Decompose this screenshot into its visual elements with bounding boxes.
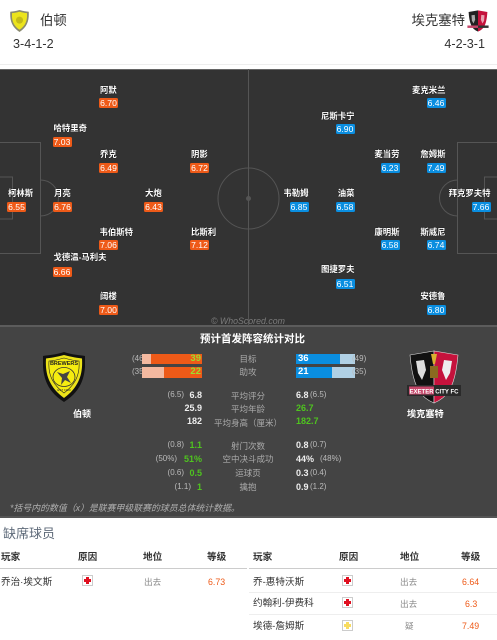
table: home missing players: 地位: [143, 552, 162, 563]
previous season assists: (35): [132, 367, 146, 376]
player: 康明斯: 康明斯: [374, 227, 400, 237]
player: 韦勒姆: 韦勒姆: [283, 188, 308, 198]
row: 约翰利-伊费科: 约翰利-伊费科: [253, 598, 314, 609]
home assists bar: [132, 366, 202, 378]
row: 埃德-詹姆斯: 7.49: [462, 621, 479, 631]
pitch markings: [0, 69, 497, 325]
home stat values: 0.5: [189, 468, 202, 478]
player: 比斯利: 7.12: [191, 240, 208, 250]
home stat values: 6.8: [189, 390, 202, 400]
away stat values: 0.9: [296, 482, 309, 492]
icon: Burton crest small: [10, 10, 29, 32]
player: 麦当劳: 6.23: [382, 163, 398, 173]
stat labels: 擒抱: [239, 482, 256, 492]
player: 拜克罗夫特: [448, 188, 491, 212]
previous season goals: (46): [132, 354, 146, 363]
previous season goals: (49): [352, 354, 366, 363]
away stat values: 0.8: [296, 440, 309, 450]
player: 月亮: 6.76: [54, 202, 71, 212]
panel: predicted lineup stats comparison: [0, 327, 497, 518]
home stat values: (1.1): [175, 482, 191, 491]
table: home missing players: [0, 551, 247, 588]
icon: Exeter crest: [407, 350, 461, 404]
player: 詹姆斯: 詹姆斯: [420, 149, 446, 159]
row: 约翰利-伊费科: 出去: [400, 599, 417, 609]
player: 阴影: 阴影: [191, 149, 208, 159]
player: 安德鲁: 6.80: [428, 305, 444, 315]
home assists value: 22: [190, 366, 201, 377]
stat labels: 目标: [239, 354, 256, 364]
away assists bar: [296, 366, 366, 378]
player: 安德鲁: [420, 291, 446, 315]
player: 阔楼: [99, 291, 118, 315]
stat labels: [214, 354, 282, 492]
home formation: 3-4-1-2: [13, 37, 54, 51]
icon: Burton crest: BREWERS: [50, 361, 78, 367]
table: home missing players: 原因: [78, 552, 97, 563]
player: 戈德温-马利夫: 6.66: [54, 267, 70, 277]
player: 阿默: [99, 85, 118, 108]
home stat values: 1.1: [189, 440, 202, 450]
stat labels: 平均身高（厘米）: [214, 418, 282, 428]
watermark: © WhoScored.com: [211, 316, 285, 326]
table: away missing players: 玩家: [253, 552, 272, 563]
player: 阴影: 6.72: [191, 163, 208, 173]
home goals value: 39: [190, 353, 201, 364]
home stat values: (0.8): [168, 440, 184, 449]
panel: pitch: [0, 69, 497, 327]
stats title: 预计首发阵容统计对比: [200, 333, 305, 345]
icon: injury cross: [342, 597, 353, 608]
player: 比斯利: 比斯利: [191, 227, 216, 237]
player: 月亮: [53, 188, 72, 212]
home stat values: (6.5): [168, 390, 184, 399]
player: 韦勒姆: [283, 188, 309, 212]
row: 乔治·埃文斯: [1, 575, 225, 588]
row: 埃德-詹姆斯: 疑: [405, 621, 414, 631]
away goals value: 36: [298, 353, 309, 364]
away stat values: (6.5): [310, 390, 326, 399]
player: 乔克: [99, 149, 118, 173]
player: 乔克: 6.49: [100, 163, 117, 173]
stat labels: 射门次数: [231, 441, 265, 451]
player: 比斯利: [190, 227, 216, 250]
player: 麦克米兰: 麦克米兰: [412, 85, 446, 95]
away stat values: (48%): [320, 454, 341, 463]
player: 安德鲁: 安德鲁: [420, 291, 446, 301]
player: 拜克罗夫特: 7.66: [473, 202, 489, 212]
away stat values: (1.2): [310, 482, 326, 491]
row: 约翰利-伊费科: [249, 597, 497, 611]
player: 柯林斯: [7, 188, 33, 212]
player: 詹姆斯: 7.49: [428, 163, 444, 173]
away stat values: 182.7: [296, 416, 319, 426]
player: 图捷罗夫: 图捷罗夫: [321, 264, 354, 274]
player: 麦当劳: 麦当劳: [374, 149, 400, 159]
player: 斯威尼: 斯威尼: [420, 227, 446, 237]
home team name: 伯顿: [40, 13, 67, 28]
player: 詹姆斯: [420, 149, 446, 173]
player: 乔克: 乔克: [100, 149, 117, 159]
home stat values: (50%): [156, 454, 177, 463]
player: 尼斯卡宁: 6.90: [337, 124, 353, 134]
home goals bar: [132, 353, 202, 364]
player: 哈特里奇: 哈特里奇: [54, 123, 87, 133]
away stat values: (0.4): [310, 468, 326, 477]
row: 乔-惠特沃斯: 6.64: [462, 577, 479, 587]
stat labels: 助攻: [239, 367, 256, 377]
home stat values: [156, 390, 202, 492]
player: 尼斯卡宁: 尼斯卡宁: [321, 111, 354, 121]
away goals bar: [296, 353, 366, 364]
player: 韦伯斯特: [99, 227, 133, 250]
home stat values: 51%: [184, 454, 202, 464]
header: match teams and formations: [0, 0, 497, 65]
player: 阔楼: 7.00: [100, 305, 117, 315]
stat labels: 平均评分: [231, 391, 265, 401]
player: 大炮: 大炮: [145, 188, 162, 198]
home stat values: 182: [187, 416, 202, 426]
stat labels: 运球页: [235, 468, 261, 478]
player: 韦伯斯特: 韦伯斯特: [100, 227, 133, 237]
player: 韦伯斯特: 7.06: [100, 240, 117, 250]
icon: injury cross: [82, 575, 93, 586]
table: home missing players: 玩家: [1, 552, 20, 563]
table: away missing players: 等级: [461, 552, 480, 563]
home players: [7, 85, 216, 315]
away crest label: 埃克塞特: [407, 409, 444, 419]
player: 月亮: 月亮: [54, 188, 71, 198]
away stat values: 44%: [296, 454, 314, 464]
row: 乔-惠特沃斯: 出去: [400, 577, 417, 587]
player: 哈特里奇: [53, 123, 87, 147]
player: 哈特里奇: 7.03: [54, 137, 70, 147]
player: 大炮: [144, 188, 163, 212]
away players: [283, 85, 491, 315]
icon: Burton crest: [43, 352, 85, 402]
player: 阿默: 6.70: [100, 98, 117, 108]
player: 柯林斯: 柯林斯: [8, 188, 33, 198]
player: 大炮: 6.43: [145, 202, 162, 212]
player: 阴影: [190, 149, 209, 173]
player: 麦克米兰: [412, 85, 446, 108]
player: 斯威尼: 6.74: [428, 240, 444, 250]
away stat values: 0.3: [296, 468, 309, 478]
table: away missing players: 原因: [339, 552, 358, 563]
away formation: 4-2-3-1: [444, 37, 485, 51]
away stat values: (0.7): [310, 440, 326, 449]
away stat values: [296, 390, 341, 492]
player: 麦当劳: [374, 149, 400, 173]
away stat values: 6.8: [296, 390, 309, 400]
player: 尼斯卡宁: [321, 111, 355, 134]
player: 斯威尼: [420, 227, 446, 250]
table: home missing players: 等级: [207, 552, 226, 563]
row: 埃德-詹姆斯: [249, 619, 497, 633]
player: 油菜: 油菜: [338, 188, 354, 198]
table: away missing players: 地位: [400, 552, 419, 563]
player: 图捷罗夫: 6.51: [337, 279, 353, 289]
player: 图捷罗夫: [321, 264, 355, 289]
player: 油菜: 6.58: [337, 202, 353, 212]
player: 阿默: 阿默: [100, 85, 117, 95]
player: 麦克米兰: 6.46: [428, 98, 444, 108]
icon: injury cross: [342, 575, 353, 586]
icon: Burton crest: EST 1950: [57, 388, 71, 392]
row: 埃德-詹姆斯: 埃德-詹姆斯: [253, 620, 304, 632]
player: 戈德温-马利夫: [53, 252, 107, 277]
player: 油菜: [336, 188, 355, 212]
home stat values: 1: [197, 482, 202, 492]
row: 乔治·埃文斯: 6.73: [208, 577, 225, 587]
home stat values: 25.9: [184, 403, 202, 413]
player: 康明斯: 6.58: [382, 240, 398, 250]
footnote: *括号内的数值（x）是联赛甲级联赛的球员总体统计数据。: [10, 503, 240, 513]
away stat values: 26.7: [296, 403, 314, 413]
home crest label: 伯顿: [73, 409, 91, 419]
row: 乔-惠特沃斯: 乔-惠特沃斯: [253, 576, 304, 588]
icon: doubtful cross: [342, 620, 353, 631]
row: 乔治·埃文斯: 乔治·埃文斯: [1, 576, 52, 588]
player: 柯林斯: 6.55: [8, 202, 25, 212]
player: 戈德温-马利夫: 戈德温-马利夫: [54, 252, 107, 262]
player: 阔楼: 阔楼: [100, 291, 117, 301]
stat labels: 空中决斗成功: [222, 454, 274, 464]
player: 拜克罗夫特: 拜克罗夫特: [449, 188, 490, 198]
heading: missing players: 缺席球员: [3, 526, 55, 541]
row: 约翰利-伊费科: 6.3: [465, 599, 477, 609]
stat labels: 平均年龄: [231, 404, 265, 414]
table: away missing players: [249, 551, 497, 632]
player: 康明斯: [374, 227, 400, 250]
row: 乔治·埃文斯: 出去: [144, 577, 161, 587]
row: 乔-惠特沃斯: [249, 575, 497, 589]
icon: Exeter crest small: [467, 10, 489, 32]
home stat values: (0.6): [168, 468, 184, 477]
away team name: 埃克塞特: [411, 13, 465, 28]
away assists value: 21: [298, 366, 309, 377]
icon: Exeter crest: EXETER CITY FC: [410, 388, 459, 395]
player: 韦勒姆: 6.85: [291, 202, 307, 212]
previous season assists: (35): [352, 367, 366, 376]
